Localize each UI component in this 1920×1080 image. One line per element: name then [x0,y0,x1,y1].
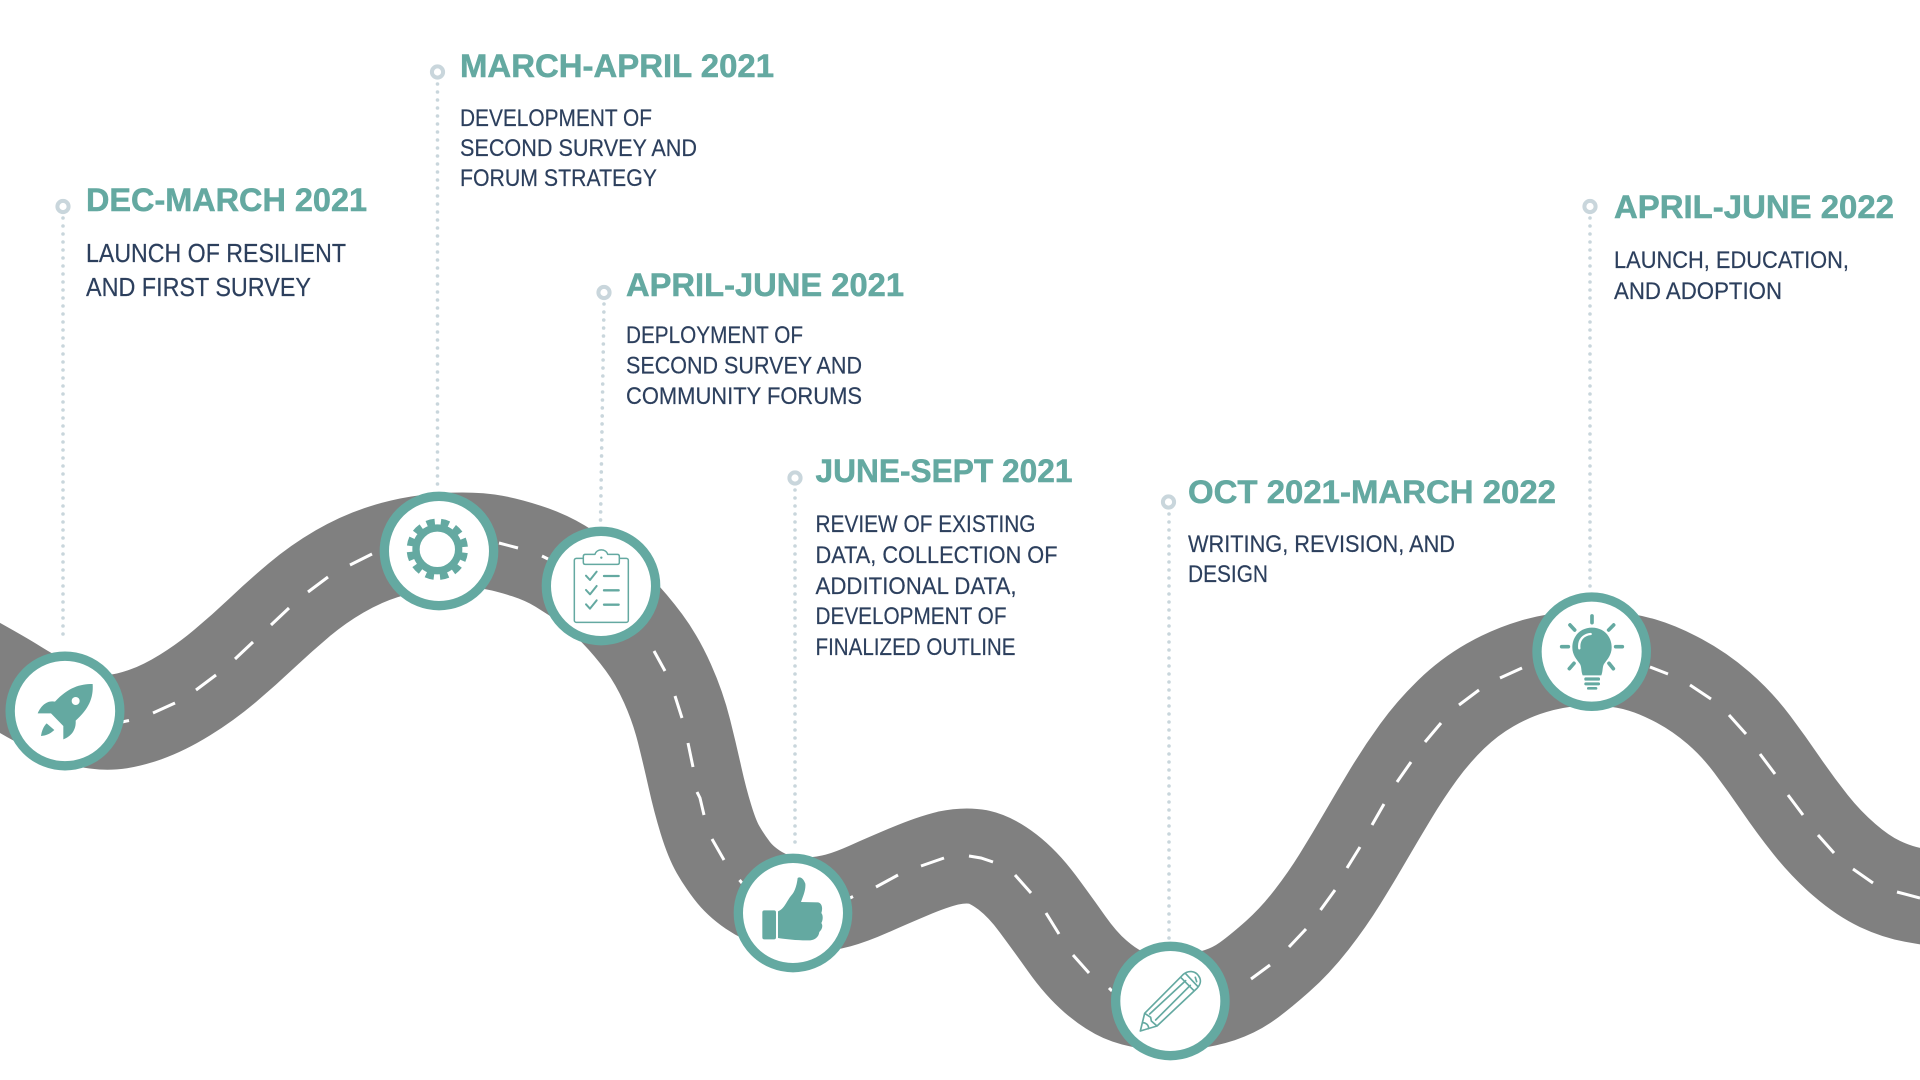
heading: APRIL-JUNE 2021 [626,267,904,303]
heading: MARCH-APRIL 2021 [460,48,774,84]
description: FINALIZED OUTLINE [816,634,1016,661]
marker ring [432,66,443,78]
description: LAUNCH, EDUCATION, [1614,247,1849,274]
description: FORUM STRATEGY [460,165,657,192]
icon: thumbs up [738,858,848,968]
milestone: April-June 2022 [1537,189,1894,706]
milestone: Oct 2021-March 2022 [1116,474,1556,1056]
heading: DEC-MARCH 2021 [86,182,367,218]
description: LAUNCH OF RESILIENT [86,240,346,268]
marker ring [598,287,610,298]
description [626,322,862,410]
description: AND FIRST SURVEY [86,274,311,302]
description: WRITING, REVISION, AND [1188,531,1455,558]
marker ring [1163,496,1174,508]
milestone: June-Sept 2021 [738,453,1072,968]
icon: clipboard checklist [546,531,656,641]
description: DATA, COLLECTION OF [816,542,1058,569]
description [460,105,697,192]
description: COMMUNITY FORUMS [626,383,862,410]
description: DEPLOYMENT OF [626,322,803,349]
icon: rocket [10,656,120,766]
connector line [600,304,604,522]
description [86,240,346,302]
marker ring [57,201,69,212]
description: DEVELOPMENT OF [816,603,1006,630]
icon: pencil [1116,946,1225,1056]
winding road [0,540,1920,1003]
heading: APRIL-JUNE 2022 [1614,189,1894,225]
connector line [1167,514,1171,940]
icon: gear [384,496,494,606]
heading: JUNE-SEPT 2021 [816,453,1072,489]
marker ring [789,472,801,484]
heading: OCT 2021-MARCH 2022 [1188,474,1556,510]
description [816,511,1058,661]
connector line [793,490,797,848]
milestone: March-April 2021 [384,48,774,606]
description: REVIEW OF EXISTING [816,511,1036,538]
description: DEVELOPMENT OF [460,105,652,132]
description: DESIGN [1188,561,1268,588]
description: AND ADOPTION [1614,278,1782,305]
connector line [1588,218,1592,588]
milestone: Dec-March 2021 [10,182,367,766]
connector line [436,84,439,486]
icon: light bulb [1537,597,1646,706]
description: SECOND SURVEY AND [460,135,697,162]
description [1188,531,1455,588]
connector line [61,218,65,642]
milestone: April-June 2021 [546,267,904,641]
description [1614,247,1849,305]
marker ring [1584,201,1596,212]
description: SECOND SURVEY AND [626,352,862,380]
description: ADDITIONAL DATA, [816,573,1016,600]
